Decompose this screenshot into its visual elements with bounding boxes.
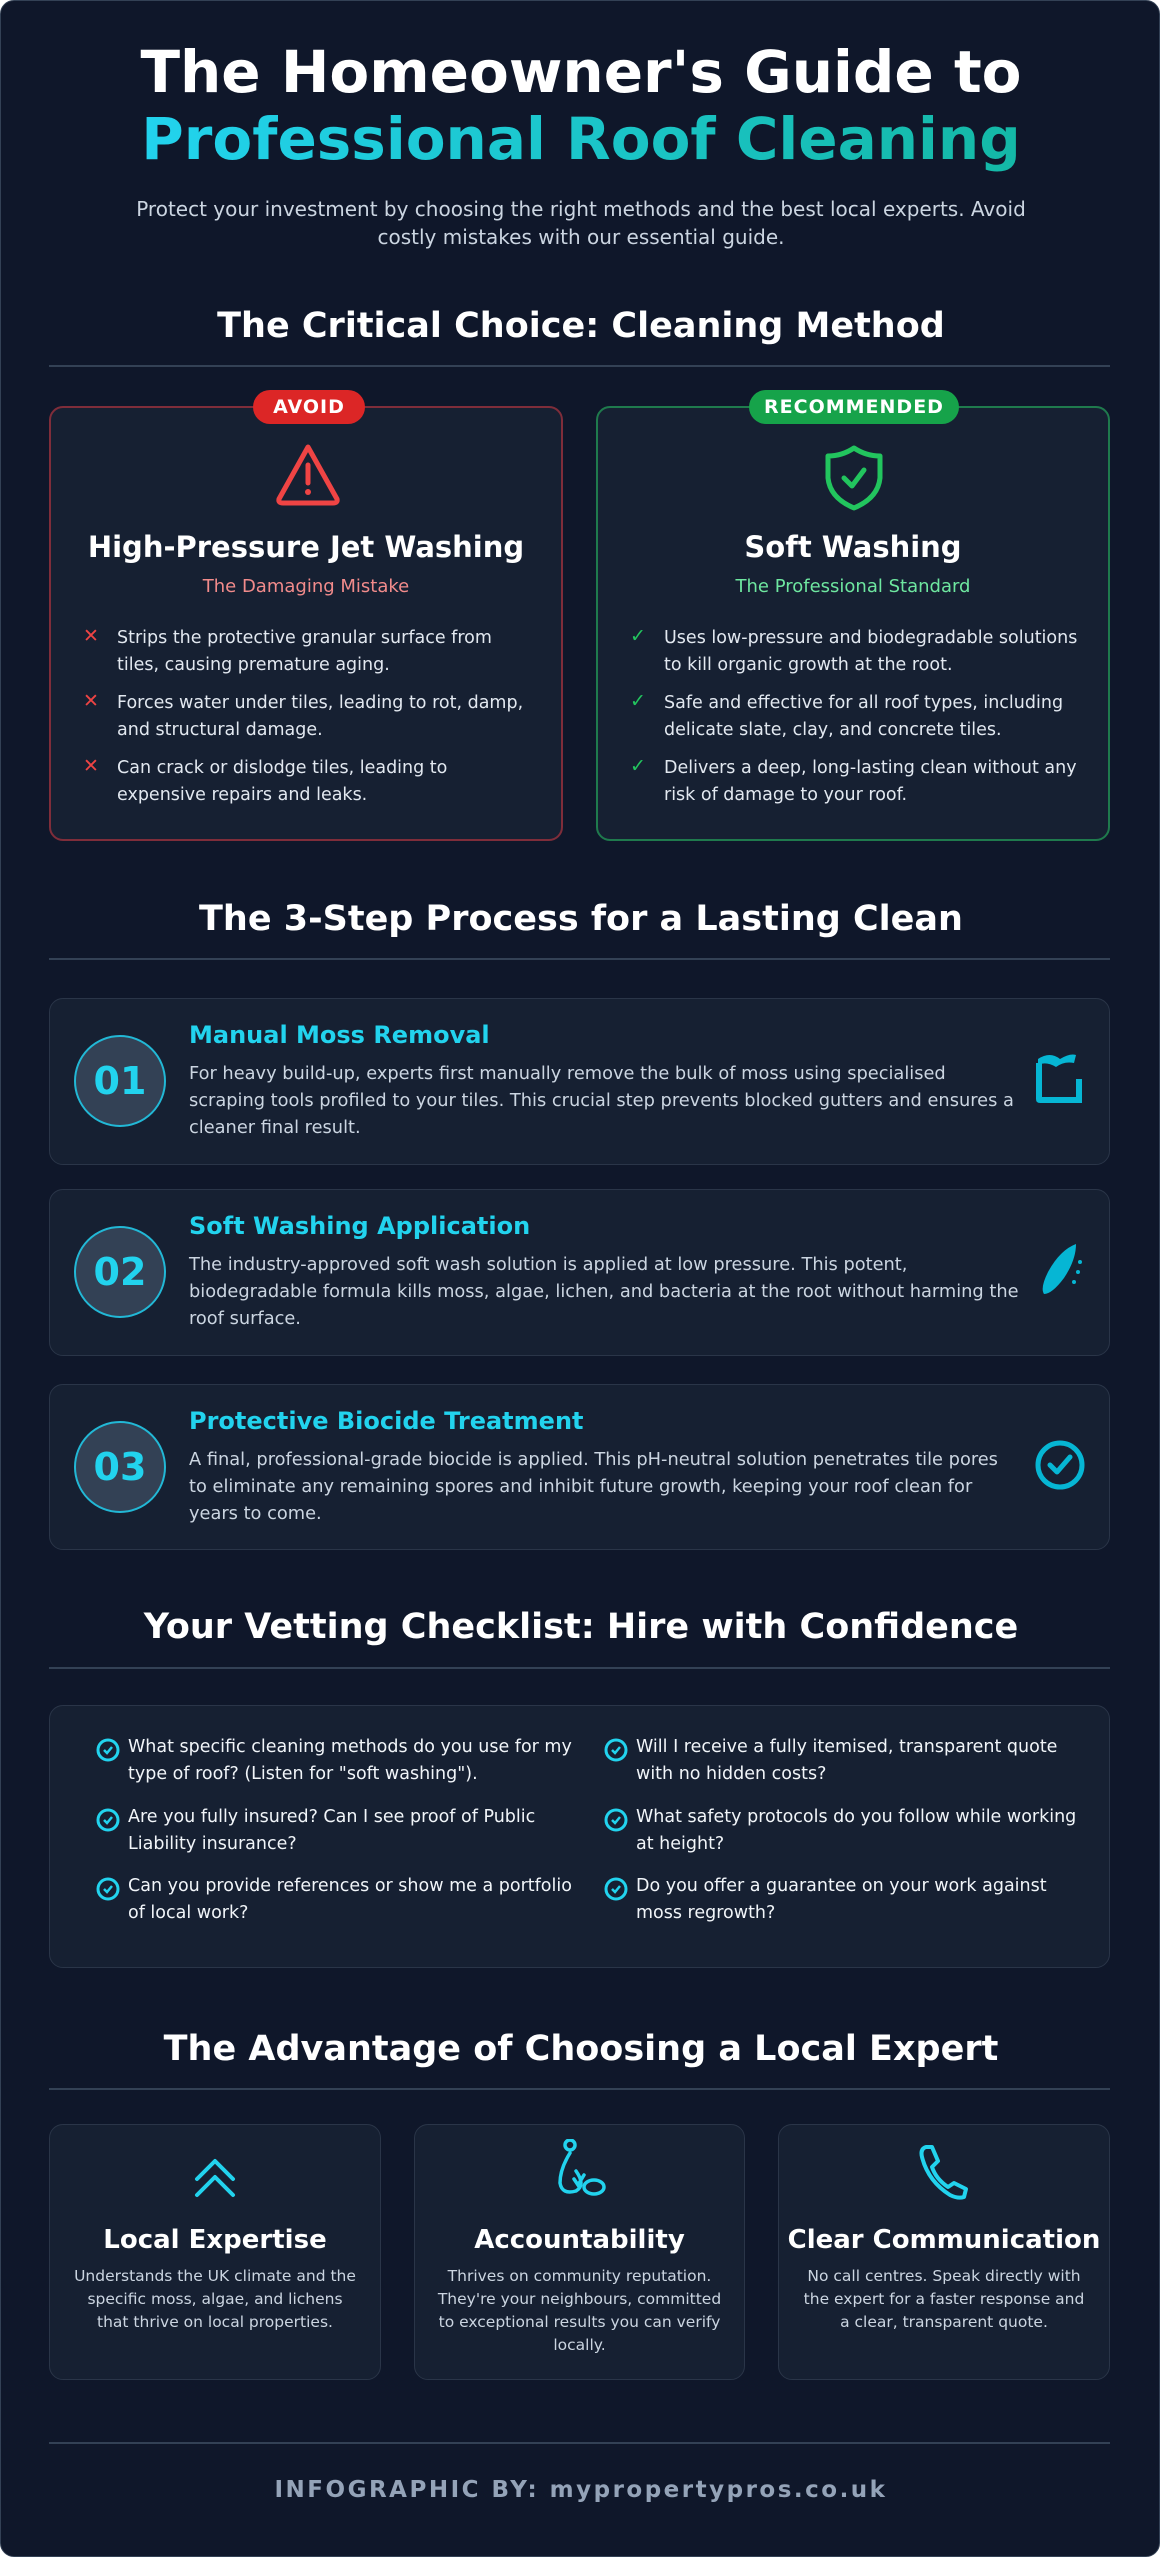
- list: avoid reasons: [83, 625, 523, 805]
- subtitle: Protect your investment by choosing the right methods and the best local experts. Avoid costly mistakes with our essential guide.: [136, 197, 1026, 249]
- step 3: [49, 1384, 1110, 1550]
- card subtitle: The Professional Standard: [736, 576, 970, 597]
- step 1: cleaner final result.: [189, 1117, 361, 1138]
- heading: cleaning method: The Critical Choice: Cleaning Method: [217, 306, 945, 346]
- panel: checklist: moss regrowth?: [636, 1903, 775, 1923]
- card: local expertise: [49, 2124, 381, 2380]
- step 1: Manual Moss Removal: [189, 1021, 490, 1049]
- card: clear communication: [778, 2124, 1110, 2380]
- panel: checklist: What specific cleaning methods do you use for my: [128, 1737, 572, 1757]
- list: benefits: delicate slate, clay, and concrete tiles.: [664, 720, 1002, 740]
- icon: spray: [1042, 1244, 1082, 1294]
- badge: avoid: AVOID: [273, 396, 345, 418]
- card: clear communication: the expert for a faster response and: [804, 2290, 1084, 2308]
- panel: checklist: of local work?: [128, 1903, 248, 1923]
- list: avoid reasons: Forces water under tiles, leading to rot, damp,: [117, 693, 523, 713]
- title: The Homeowner's Guide to: [140, 38, 1022, 106]
- panel: checklist: type of roof? (Listen for "soft washing").: [128, 1764, 478, 1784]
- panel: checklist: with no hidden costs?: [636, 1764, 826, 1784]
- badge: recommended: [749, 390, 959, 424]
- panel: avoid: [49, 406, 563, 841]
- card: accountability: Accountability: [474, 2225, 685, 2255]
- list: avoid reasons: ✕: [83, 755, 99, 777]
- icon: warning: [276, 444, 340, 506]
- card: local expertise: Local Expertise: [103, 2225, 327, 2255]
- panel: recommended: [596, 406, 1110, 841]
- list: benefits: ✓: [630, 690, 646, 712]
- step 1: For heavy build-up, experts first manually remove the bulk of moss using specialised: [189, 1063, 946, 1084]
- list: benefits: Safe and effective for all roof types, including: [664, 693, 1063, 713]
- card: accountability: [414, 2124, 745, 2380]
- footer credit: INFOGRAPHIC BY: mypropertypros.co.uk: [274, 2477, 887, 2503]
- list: benefits: Uses low-pressure and biodegradable solutions: [664, 628, 1077, 648]
- step 1: [49, 998, 1110, 1165]
- panel: checklist: [49, 1705, 1110, 1968]
- panel: checklist: Will I receive a fully itemised, transparent quote: [636, 1737, 1057, 1757]
- icon: check circle: [1036, 1440, 1084, 1490]
- step 2: 02: [94, 1250, 146, 1294]
- step 1: scraping tools profiled to your tiles. This crucial step prevents blocked gutters and ensures a: [189, 1090, 1014, 1111]
- panel: checklist: What safety protocols do you follow while working: [636, 1807, 1076, 1827]
- step 3: years to come.: [189, 1503, 322, 1524]
- list: avoid reasons: Can crack or dislodge tiles, leading to: [117, 758, 447, 778]
- step 3: 03: [94, 1445, 146, 1489]
- list: benefits: ✓: [630, 755, 646, 777]
- list: benefits: [630, 625, 1077, 805]
- card: accountability: locally.: [553, 2336, 606, 2354]
- panel: checklist: Liability insurance?: [128, 1834, 297, 1854]
- badge: avoid: [253, 390, 365, 424]
- title: Professional Roof Cleaning: [141, 105, 1021, 173]
- step 2: Soft Washing Application: [189, 1212, 530, 1240]
- list: avoid reasons: expensive repairs and leaks.: [117, 785, 367, 805]
- list: benefits: to kill organic growth at the root.: [664, 655, 953, 675]
- card: local expertise: specific moss, algae, and lichens: [87, 2290, 343, 2308]
- card: local expertise: Understands the UK climate and the: [74, 2267, 356, 2285]
- list: avoid reasons: ✕: [83, 690, 99, 712]
- list: benefits: ✓: [630, 625, 646, 647]
- heading: checklist: Your Vetting Checklist: Hire with Confidence: [144, 1607, 1018, 1647]
- card: clear communication: a clear, transparent quote.: [840, 2313, 1048, 2331]
- panel: checklist: Do you offer a guarantee on your work against: [636, 1876, 1047, 1896]
- list: benefits: risk of damage to your roof.: [664, 785, 907, 805]
- list: avoid reasons: Strips the protective granular surface from: [117, 628, 492, 648]
- step 2: roof surface.: [189, 1308, 301, 1329]
- step 3: A final, professional-grade biocide is applied. This pH-neutral solution penetrates tile pores: [189, 1449, 998, 1470]
- card: accountability: Thrives on community reputation.: [448, 2267, 711, 2285]
- step 2: [49, 1189, 1110, 1356]
- step 1: 01: [94, 1059, 146, 1103]
- step 2: biodegradable formula kills moss, algae, lichen, and bacteria at the root without harming the: [189, 1281, 1019, 1302]
- heading: local expert: The Advantage of Choosing a Local Expert: [164, 2029, 998, 2069]
- heading: process: The 3-Step Process for a Lasting Clean: [199, 899, 963, 939]
- step 2: The industry-approved soft wash solution is applied at low pressure. This potent,: [189, 1254, 907, 1275]
- card: accountability: They're your neighbours, committed: [438, 2290, 721, 2308]
- badge: recommended: RECOMMENDED: [764, 396, 944, 418]
- card: local expertise: that thrive on local properties.: [97, 2313, 333, 2331]
- list: benefits: Delivers a deep, long-lasting clean without any: [664, 758, 1077, 778]
- card: accountability: to exceptional results you can verify: [439, 2313, 720, 2331]
- card: clear communication: No call centres. Speak directly with: [807, 2267, 1081, 2285]
- card: clear communication: Clear Communication: [788, 2225, 1100, 2255]
- list: avoid reasons: and structural damage.: [117, 720, 323, 740]
- panel: checklist: Can you provide references or show me a portfolio: [128, 1876, 572, 1896]
- panel: checklist: Are you fully insured? Can I see proof of Public: [128, 1807, 535, 1827]
- card title: Soft Washing: [744, 530, 962, 564]
- icon: scraper: [1036, 1054, 1082, 1103]
- step 3: to eliminate any remaining spores and inhibit future growth, keeping your roof clean for: [189, 1476, 972, 1497]
- list: avoid reasons: ✕: [83, 625, 99, 647]
- step 3: Protective Biocide Treatment: [189, 1407, 584, 1435]
- list: avoid reasons: tiles, causing premature aging.: [117, 655, 390, 675]
- icon: shield: [826, 446, 882, 510]
- title: [140, 38, 1022, 173]
- panel: checklist: at height?: [636, 1834, 724, 1854]
- card title: High-Pressure Jet Washing: [88, 530, 524, 564]
- card subtitle: The Damaging Mistake: [203, 576, 409, 597]
